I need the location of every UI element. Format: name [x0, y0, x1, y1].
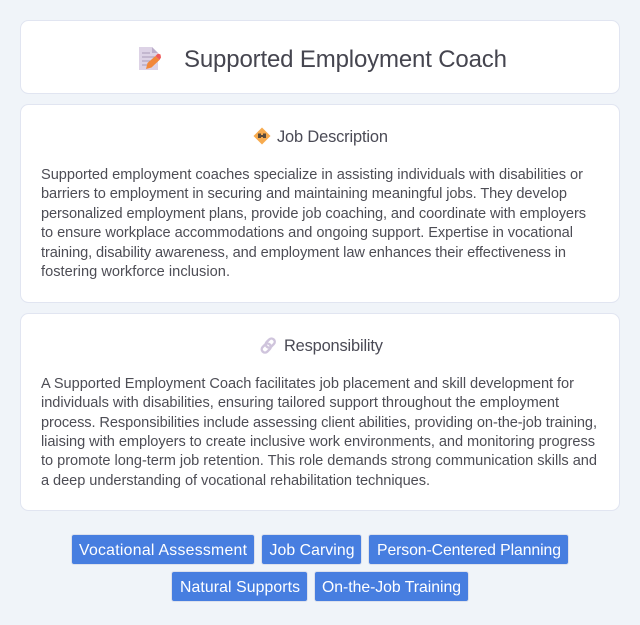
tag: job carving: Job Carving — [270, 542, 354, 559]
heading: responsibility: Responsibility — [284, 337, 384, 355]
title: Supported Employment Coach — [184, 46, 507, 73]
tag: person-centered planning: Person-Centered Planning — [377, 542, 561, 559]
icon: orange diamond — [254, 128, 270, 144]
text block: job description: personalized employment plans, provide job coaching, and coordinate with employers — [41, 206, 586, 222]
text block: responsibility: a deep understanding of vocational rehabilitation techniques. — [41, 473, 430, 489]
text block: job description — [41, 167, 586, 280]
tag: job carving — [262, 534, 362, 564]
text block: job description: Supported employment coaches specialize in assisting individuals with disabilities or — [41, 167, 583, 183]
tag: person-centered planning — [368, 534, 568, 564]
tag: natural supports: Natural Supports — [180, 579, 300, 596]
text block: responsibility: to promote long-term job retention. This role demands strong communication skills and — [41, 453, 597, 469]
tag: vocational assessment: Vocational Assessment — [79, 542, 248, 559]
text block: responsibility: process. Responsibilities include assessing client abilities, providing on-the-job training, — [41, 415, 597, 431]
text block: responsibility — [41, 376, 597, 489]
tag: on-the-job training: On-the-Job Training — [322, 579, 461, 596]
icon: memo with pencil — [139, 47, 161, 70]
tag: vocational assessment — [72, 534, 254, 564]
icon: link — [260, 337, 276, 354]
text block: responsibility: A Supported Employment Coach facilitates job placement and skill development for — [41, 376, 574, 392]
panel: title header — [20, 20, 620, 94]
heading: job description: Job Description — [277, 128, 388, 146]
text block: job description: fostering workforce inclusion. — [41, 264, 230, 280]
text block: responsibility: liaising with employers to create inclusive work environments, and monitoring progress — [41, 434, 595, 450]
text block: job description: training, disability awareness, and employment law enhances their effectiveness in — [41, 245, 566, 261]
panel: job description — [20, 104, 620, 302]
text block: job description: to ensure workplace accommodations and ongoing support. Expertise in vocational — [41, 225, 573, 241]
tag: on-the-job training — [314, 572, 468, 602]
tag: natural supports — [172, 572, 308, 602]
text block: job description: barriers to employment in securing and maintaining meaningful jobs. They develop — [41, 186, 567, 202]
text block: responsibility: individuals with disabilities, ensuring tailored support throughout the employment — [41, 395, 559, 411]
panel: responsibility — [20, 314, 620, 510]
tag group — [72, 534, 568, 602]
